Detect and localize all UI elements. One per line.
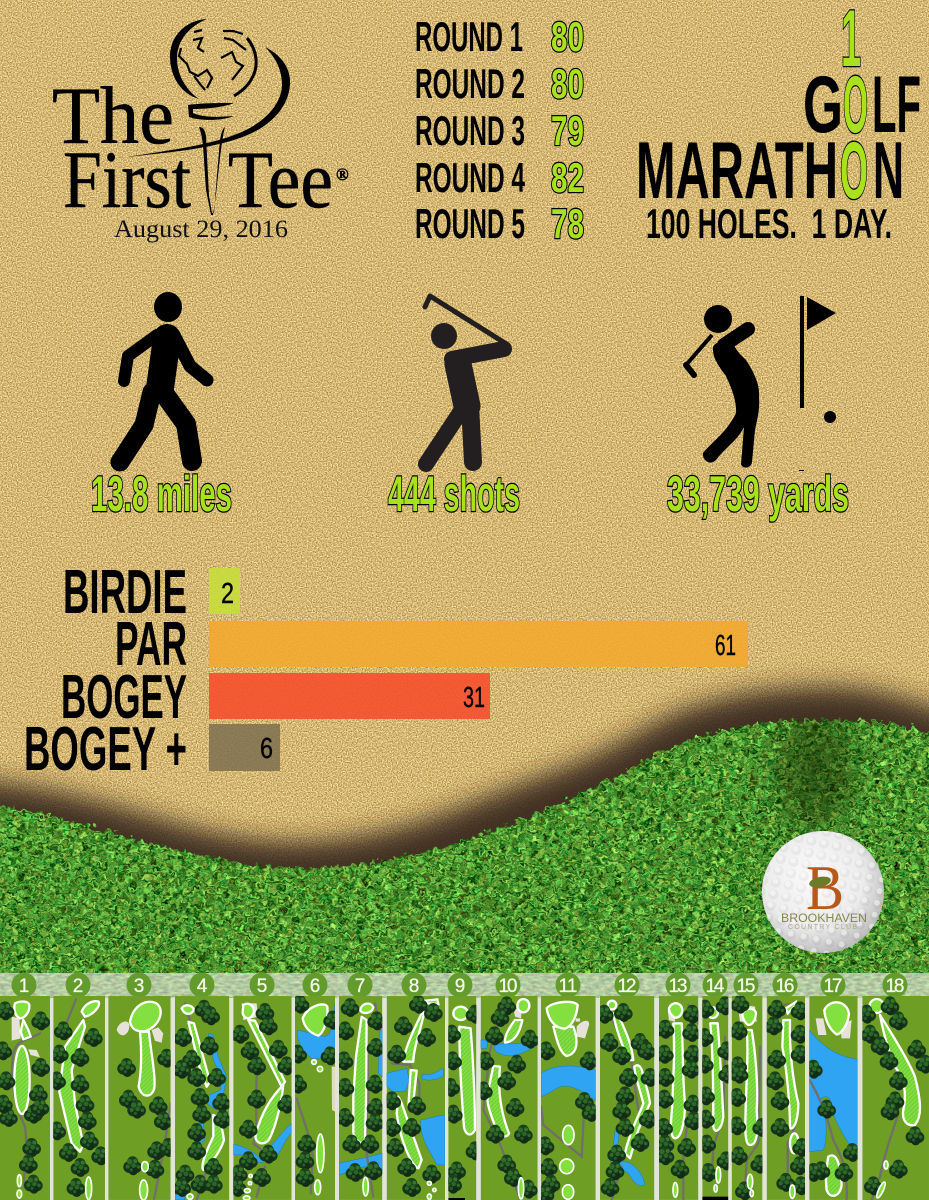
- hole 16 map: [766, 996, 805, 1200]
- hole 14 map: [702, 996, 728, 1200]
- bar: birdie: 2: [221, 578, 234, 610]
- bar: bogey: [61, 663, 490, 732]
- hole numbers: 5: [257, 976, 267, 997]
- icon: golfer backswing: [425, 296, 508, 464]
- hole numbers: 6: [310, 976, 320, 997]
- title: 100 golf marathon: O: [840, 126, 868, 216]
- round scores: ROUND 1: [415, 13, 523, 60]
- icon: walking figure: [120, 292, 207, 462]
- hole numbers: 17: [824, 976, 842, 997]
- hole numbers: 12: [618, 976, 636, 997]
- hole strip background: [0, 973, 929, 1200]
- hole numbers: 8: [409, 976, 419, 997]
- hole numbers: 13: [668, 976, 688, 997]
- hole 12 map: [600, 996, 654, 1200]
- hole numbers: 18: [886, 976, 904, 997]
- grass: [0, 717, 929, 973]
- first tee logo: The: [52, 70, 174, 161]
- hole 1 map: [0, 996, 50, 1200]
- round scores: ROUND 5: [415, 200, 525, 247]
- hole 10 map: [480, 996, 538, 1200]
- hole 8 map: [386, 996, 445, 1200]
- round scores: ROUND 2: [415, 60, 525, 107]
- hole numbers: 9: [455, 976, 465, 997]
- hole 3 map: [108, 996, 171, 1200]
- round scores: [415, 13, 584, 247]
- hole 18 map: [862, 996, 929, 1200]
- hole numbers: 16: [776, 976, 794, 997]
- hole 7 map: [339, 996, 382, 1200]
- hole 5 map: [233, 996, 292, 1200]
- icon: golfer follow-through with flag: [686, 296, 836, 471]
- hole numbers: 1: [19, 976, 29, 997]
- hole 11 map: [541, 996, 596, 1200]
- golf ball with brookhaven logo: B: [806, 852, 844, 923]
- hole 2 map: [53, 996, 105, 1200]
- round scores: 82: [551, 154, 584, 201]
- title: 100 golf marathon: O: [843, 60, 868, 150]
- round scores: ROUND 3: [415, 107, 525, 154]
- hole numbers: 7: [355, 976, 365, 997]
- first tee logo: Tee: [228, 134, 333, 225]
- first tee logo: ®: [336, 165, 349, 184]
- bar: par: PAR: [115, 610, 187, 679]
- bar: par: 61: [715, 630, 736, 662]
- title: 100 golf marathon: [636, 0, 921, 247]
- hole numbers: 11: [558, 976, 578, 997]
- hole numbers: 15: [736, 976, 756, 997]
- hole 13 map: [659, 996, 698, 1200]
- hole 17 map: [809, 996, 858, 1200]
- first tee logo: [52, 19, 349, 243]
- hole numbers: 2: [73, 976, 83, 997]
- bar: bogey: 31: [463, 682, 485, 714]
- title: 100 golf marathon: G: [803, 60, 843, 150]
- hole 15 map: [732, 996, 762, 1200]
- bar: bogey plus: BOGEY +: [24, 715, 187, 784]
- bar: bogey plus: 6: [260, 733, 273, 765]
- hole numbers: 14: [706, 976, 725, 997]
- hole numbers: 4: [197, 976, 208, 997]
- bar chart: score types: [24, 558, 748, 784]
- golf ball with brookhaven logo: BROOKHAVEN: [781, 913, 867, 925]
- hole 6 map: [295, 996, 335, 1200]
- stat: 444 shots: 444 shots: [388, 466, 520, 522]
- logo tee: [188, 103, 234, 120]
- bar: birdie: BIRDIE: [63, 558, 187, 627]
- hole numbers: [12, 972, 908, 998]
- hole numbers: 10: [498, 976, 518, 997]
- stat: 13.8 miles: 13.8 miles: [91, 466, 232, 522]
- bunker shadow: [0, 687, 929, 900]
- round scores: 80: [551, 13, 584, 60]
- round scores: 80: [551, 60, 584, 107]
- first tee logo: First: [63, 134, 191, 225]
- round scores: ROUND 4: [415, 154, 525, 201]
- first tee logo: August 29, 2016: [114, 216, 288, 243]
- round scores: 78: [551, 200, 584, 247]
- hole 4 map: [175, 996, 230, 1200]
- golf ball with brookhaven logo: [762, 831, 884, 953]
- hole numbers: 3: [134, 976, 144, 997]
- bar: bogey: BOGEY: [61, 663, 187, 732]
- bar: par: [115, 610, 748, 679]
- golf ball with brookhaven logo: COUNTRY CLUB: [788, 924, 857, 931]
- round scores: 79: [551, 107, 584, 154]
- hole 9 map: [448, 996, 476, 1200]
